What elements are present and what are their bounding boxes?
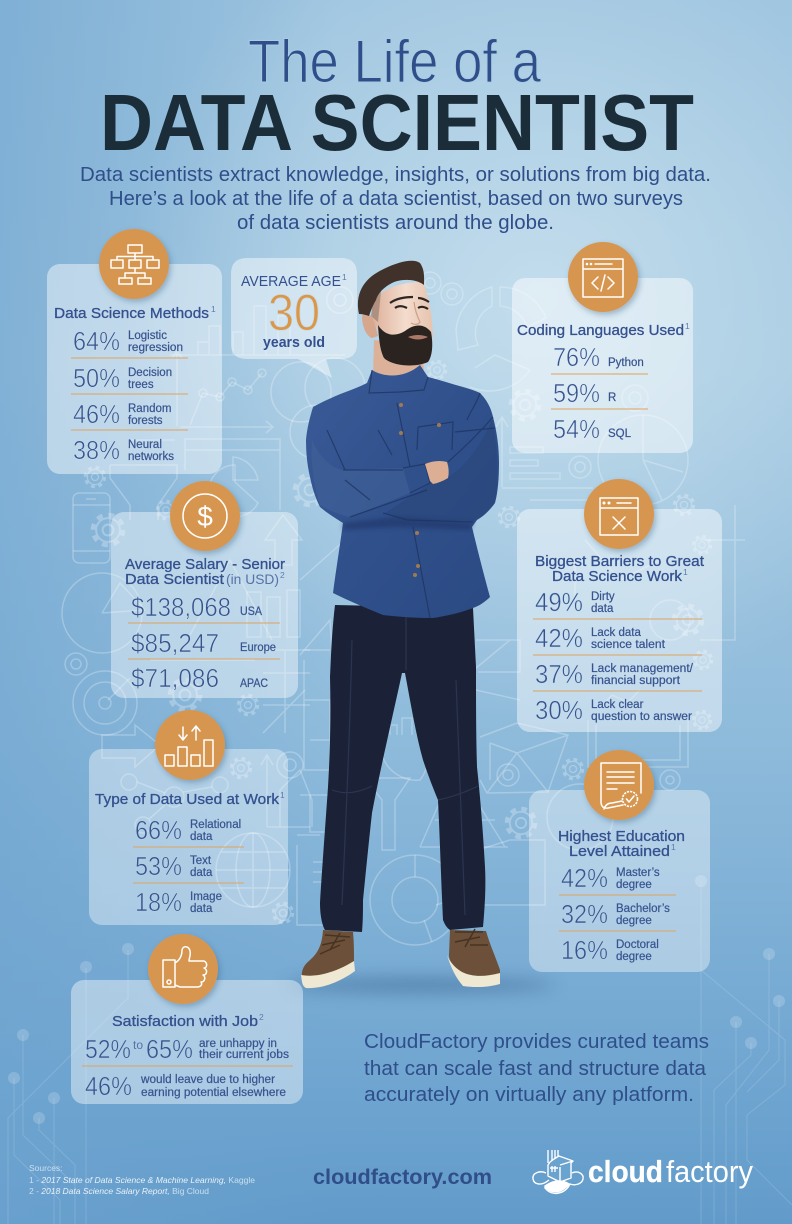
stat: image: data	[190, 903, 213, 915]
stat: unhappy range: to	[133, 1038, 143, 1052]
heading	[125, 556, 285, 588]
stat: bachelor's: degree	[616, 915, 652, 927]
intro text: Data scientists extract knowledge, insights, or solutions from big data.	[80, 164, 711, 186]
stat: usa: USA	[240, 606, 262, 618]
stat: text	[135, 851, 213, 881]
stat: random forests	[73, 399, 171, 429]
stat: random forests: Random	[128, 403, 171, 415]
heading: Data Science Methods	[54, 305, 209, 322]
face	[372, 282, 433, 352]
stat: python	[553, 342, 644, 372]
title	[100, 28, 694, 167]
stat: relational: data	[190, 831, 213, 843]
icon: dollar: $	[197, 501, 213, 532]
stat: bachelor's	[561, 899, 670, 929]
stat: would leave: 46%	[85, 1071, 132, 1101]
icon: code window	[568, 242, 638, 312]
heading: Coding Languages Used	[517, 322, 684, 339]
panel background	[512, 278, 693, 453]
nose shadow	[411, 302, 420, 324]
stat: unhappy range: 65%	[146, 1034, 193, 1064]
stat: logistic regression	[73, 326, 183, 356]
panel background	[89, 749, 288, 925]
stat: talent: science talent	[591, 639, 666, 651]
neck	[373, 340, 424, 396]
stat: logistic regression: 64%	[73, 326, 120, 356]
stat: neural networks: 38%	[73, 435, 120, 465]
closing statement	[364, 1031, 709, 1106]
icon: thumbs up	[148, 934, 218, 1004]
stat: relational: Relational	[190, 819, 241, 831]
panel background	[517, 509, 722, 732]
logo icon: factory on cloud	[533, 1150, 583, 1193]
stat: text: Text	[190, 855, 212, 867]
panel: biggest barriers	[517, 479, 722, 732]
stat: dirty data	[535, 587, 615, 617]
sources: 1 - 2017 State of Data Science & Machine Learning, Kaggle	[29, 1175, 255, 1185]
stat: relational: 66%	[135, 815, 182, 845]
heading: Satisfaction with Job	[112, 1013, 258, 1030]
callout: average age: 1	[342, 272, 347, 282]
stat: talent	[535, 623, 666, 653]
stat: random forests: 46%	[73, 399, 120, 429]
sources: Sources:	[29, 1163, 63, 1173]
stat: europe: Europe	[240, 642, 276, 654]
stat: apac	[131, 663, 268, 693]
intro text	[80, 164, 711, 234]
stat: unhappy range	[85, 1034, 289, 1064]
panel: type of data: 1	[280, 790, 285, 800]
panel: type of data	[89, 710, 288, 925]
closing statement: that can scale fast and structure data	[364, 1058, 707, 1080]
stat: image: 18%	[135, 887, 182, 917]
stat: would leave: would leave due to higher	[140, 1074, 275, 1086]
stat: dirty data: data	[591, 603, 614, 615]
panel: coding languages: 1	[685, 321, 690, 331]
stat: doctoral: degree	[616, 951, 652, 963]
stat: neural networks: networks	[128, 451, 174, 463]
stat: dirty data: Dirty	[591, 591, 615, 603]
trousers	[320, 605, 485, 932]
background pattern: circuit lines	[8, 875, 792, 1224]
heading: 2	[280, 570, 285, 580]
heading: Highest Education	[558, 828, 685, 845]
panel: data science methods: 1	[211, 304, 216, 314]
ground shadow	[285, 977, 555, 993]
logo	[533, 1150, 753, 1193]
stat: clear question: question to answer	[591, 711, 692, 723]
shirt shadow under arms	[343, 517, 473, 530]
stat: r: 59%	[553, 378, 600, 408]
intro text: Here’s a look at the life of a data scientist, based on two surveys	[109, 188, 683, 210]
stat: management	[535, 659, 694, 689]
stat: doctoral: 16%	[561, 935, 608, 965]
panel: average salary	[111, 481, 298, 698]
hair	[358, 261, 424, 316]
heading: Data Scientist	[125, 571, 225, 588]
stat: r: R	[608, 392, 616, 404]
heading: 1	[671, 842, 676, 852]
panel background	[529, 790, 710, 972]
stat: decision trees	[73, 363, 172, 393]
icon: flowchart	[99, 229, 169, 299]
stat: unhappy range: their current jobs	[199, 1049, 289, 1061]
stat: logistic regression: Logistic	[128, 330, 167, 342]
eyes and brows	[390, 297, 429, 303]
heading: Level Attained	[569, 843, 670, 860]
panel: satisfaction with job: 2	[259, 1012, 264, 1022]
stat: apac: APAC	[240, 678, 268, 690]
shirt buttons	[399, 403, 441, 577]
panel: coding languages	[512, 242, 693, 453]
icon: error window	[584, 479, 654, 549]
stat: would leave	[85, 1071, 286, 1101]
stat: image	[135, 887, 222, 917]
stat: sql: SQL	[608, 428, 632, 440]
stat: decision trees: trees	[128, 379, 154, 391]
stat: management: 37%	[535, 659, 583, 689]
sources	[29, 1163, 255, 1196]
stat: unhappy range: are unhappy in	[199, 1038, 277, 1050]
stat: python: Python	[608, 357, 644, 369]
shirt folds and seams	[327, 370, 495, 618]
icon: dollar	[170, 481, 240, 551]
person	[285, 261, 555, 993]
closing statement: CloudFactory provides curated teams	[364, 1031, 709, 1053]
mouth	[408, 335, 428, 340]
panel: data science methods	[47, 229, 222, 474]
stat: would leave: earning potential elsewhere	[141, 1087, 286, 1099]
stat: clear question: 30%	[535, 695, 583, 725]
stat: image: Image	[190, 891, 222, 903]
stat: neural networks	[73, 435, 174, 465]
heading: Biggest Barriers to Great	[535, 553, 705, 570]
stat: dirty data: 49%	[535, 587, 583, 617]
value: 30	[268, 284, 320, 341]
stat: decision trees: 50%	[73, 363, 120, 393]
stat: clear question: Lack clear	[591, 699, 644, 711]
logo: factory	[666, 1154, 753, 1189]
speech bubble	[231, 258, 357, 378]
stat: usa: $138,068	[131, 592, 231, 622]
stat: sql: 54%	[553, 414, 600, 444]
stat: text: data	[190, 867, 213, 879]
panel background	[71, 980, 303, 1104]
heading: 1	[683, 567, 688, 577]
title line 1: The Life of a	[248, 28, 542, 95]
stat: europe	[131, 628, 276, 658]
background pattern: gears and targets	[86, 287, 711, 922]
closing statement: accurately on virtually any platform.	[364, 1084, 694, 1106]
stat: apac: $71,086	[131, 663, 219, 693]
website url: cloudfactory.com	[313, 1166, 492, 1189]
ear	[362, 314, 378, 338]
heading: Average Salary - Senior	[125, 556, 285, 573]
icon: certificate	[584, 750, 654, 820]
stat: master's: degree	[616, 879, 652, 891]
stat: management: Lack management/	[591, 663, 694, 675]
heading: Data Science Work	[552, 568, 683, 585]
stat: text: 53%	[135, 851, 182, 881]
beard	[378, 325, 432, 365]
temple fade	[371, 291, 381, 322]
heading: (in USD)	[226, 571, 279, 587]
intro text: of data scientists around the globe.	[237, 212, 554, 234]
stat: master's: 42%	[561, 863, 608, 893]
stat: bachelor's: Bachelor’s	[616, 903, 670, 915]
stat: talent: Lack data	[591, 627, 641, 639]
stat: management: financial support	[591, 675, 681, 687]
stat: master's	[561, 863, 660, 893]
stat: random forests: forests	[128, 415, 163, 427]
shirt	[306, 365, 499, 618]
stat: master's: Master’s	[616, 867, 660, 879]
stat: doctoral: Doctoral	[616, 939, 659, 951]
hand	[425, 461, 449, 484]
heading: Type of Data Used at Work	[95, 791, 280, 808]
stat: doctoral	[561, 935, 659, 965]
unit: years old	[263, 334, 325, 351]
stat: neural networks: Neural	[128, 439, 162, 451]
panel background	[47, 264, 222, 474]
shirt sleeve highlights	[312, 440, 410, 517]
panel background	[111, 512, 298, 698]
left shoe	[302, 930, 354, 979]
callout: average age	[231, 258, 357, 378]
right shoe	[449, 930, 500, 979]
heading	[535, 553, 705, 585]
sources: 2 - 2018 Data Science Salary Report, Big Cloud	[29, 1186, 209, 1196]
stat: relational	[135, 815, 241, 845]
stat: clear question	[535, 695, 692, 725]
panel: satisfaction with job	[71, 934, 303, 1104]
background pattern: data line icons	[10, 272, 745, 945]
stat: decision trees: Decision	[128, 367, 172, 379]
label: AVERAGE AGE	[241, 273, 341, 290]
title line 2: DATA SCIENTIST	[100, 78, 694, 167]
icon: bars	[155, 710, 225, 780]
stat: bachelor's: 32%	[561, 899, 608, 929]
panel: education	[529, 750, 710, 972]
stat: python: 76%	[553, 342, 600, 372]
stat: unhappy range: 52%	[85, 1034, 131, 1064]
stat: talent: 42%	[535, 623, 583, 653]
logo wordmark: cloud	[588, 1154, 663, 1189]
stat: europe: $85,247	[131, 628, 219, 658]
stat: logistic regression: regression	[128, 342, 183, 354]
stat: sql	[553, 414, 632, 444]
heading	[558, 828, 685, 860]
